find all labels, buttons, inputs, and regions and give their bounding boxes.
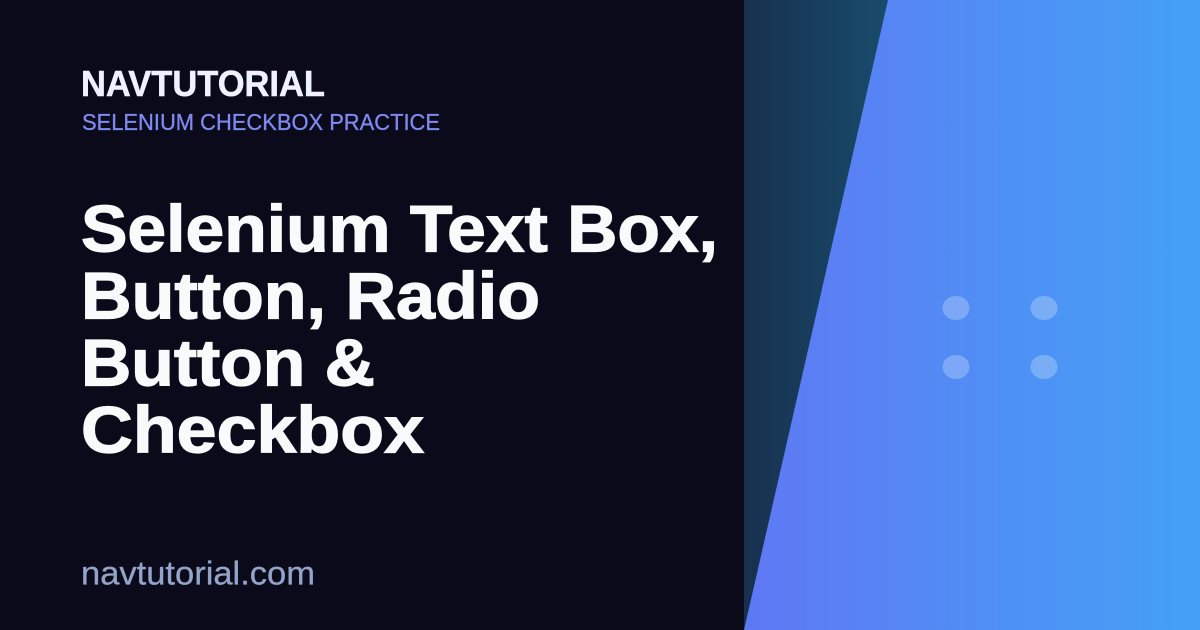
panel: blue slanted gradient [744,0,1200,630]
subtitle: SELENIUM CHECKBOX PRACTICE [82,109,440,135]
website url: navtutorial.com [81,554,315,592]
title: Button, Radio [81,258,540,332]
panel: dark teal strip [744,0,890,630]
title [81,192,718,466]
icon: four dots [942,296,1058,379]
title: Button & [81,326,375,400]
title: Checkbox [81,392,424,466]
title: Selenium Text Box, [81,192,718,266]
brand name: NAVTUTORIAL [81,63,325,104]
